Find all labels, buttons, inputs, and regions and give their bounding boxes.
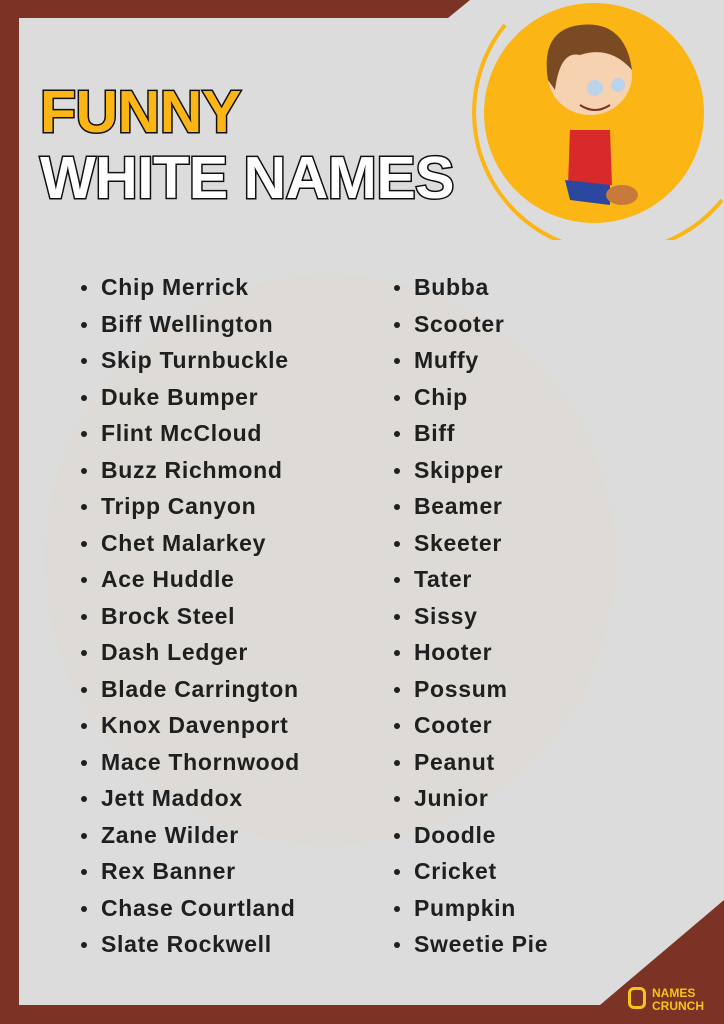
list: column 2: Cricket	[414, 858, 497, 884]
list: column 2: Scooter	[414, 310, 505, 336]
list: column 1: Flint McCloud	[101, 420, 262, 446]
list: column 2: Cooter	[414, 712, 492, 738]
list: column 1: Knox Davenport	[101, 712, 288, 738]
list: column 1: Buzz Richmond	[101, 456, 283, 482]
logo: CRUNCH	[652, 999, 704, 1013]
list: column 2: Sissy	[414, 602, 478, 628]
title	[38, 79, 454, 211]
list: column 1: Blade Carrington	[101, 676, 299, 702]
list: column 1: Dash Ledger	[101, 639, 248, 665]
list: column 2: Beamer	[414, 493, 503, 519]
list: column 2: Bubba	[414, 274, 489, 300]
logo: NAMES	[652, 986, 695, 1000]
list: column 2: Possum	[414, 676, 508, 702]
list: column 1: Zane Wilder	[101, 822, 239, 848]
list: column 2: Skeeter	[414, 530, 502, 556]
list: column 2: Skipper	[414, 456, 503, 482]
illustration: boy in yellow circle	[472, 3, 724, 240]
list: column 1: Chip Merrick	[101, 274, 249, 300]
list: column 1: Biff Wellington	[101, 310, 273, 336]
list: column 2: Junior	[414, 785, 488, 811]
list: column 1: Rex Banner	[101, 858, 236, 884]
list: column 2: Biff	[414, 420, 455, 446]
list: column 1: Jett Maddox	[101, 785, 243, 811]
list: column 1: Brock Steel	[101, 602, 235, 628]
list: column 1	[81, 274, 300, 957]
list: column 2: Hooter	[414, 639, 492, 665]
list: column 2: Muffy	[414, 347, 479, 373]
title: FUNNY	[40, 79, 241, 145]
list: column 2: Doodle	[414, 822, 496, 848]
title: WHITE NAMES	[40, 145, 454, 211]
list: column 1: Chet Malarkey	[101, 530, 266, 556]
list: column 1: Slate Rockwell	[101, 931, 272, 957]
list: column 1: Tripp Canyon	[101, 493, 256, 519]
logo	[628, 986, 704, 1013]
list: column 1: Chase Courtland	[101, 894, 296, 920]
list: column 2: Pumpkin	[414, 894, 516, 920]
list: column 1: Duke Bumper	[101, 384, 258, 410]
list: column 2	[394, 274, 548, 957]
list: column 2: Peanut	[414, 748, 495, 774]
list: column 2: Tater	[414, 566, 472, 592]
list: column 2: Chip	[414, 384, 468, 410]
list: column 1: Skip Turnbuckle	[101, 347, 289, 373]
list: column 2: Sweetie Pie	[414, 931, 548, 957]
list: column 1: Ace Huddle	[101, 566, 235, 592]
list: column 1: Mace Thornwood	[101, 748, 300, 774]
